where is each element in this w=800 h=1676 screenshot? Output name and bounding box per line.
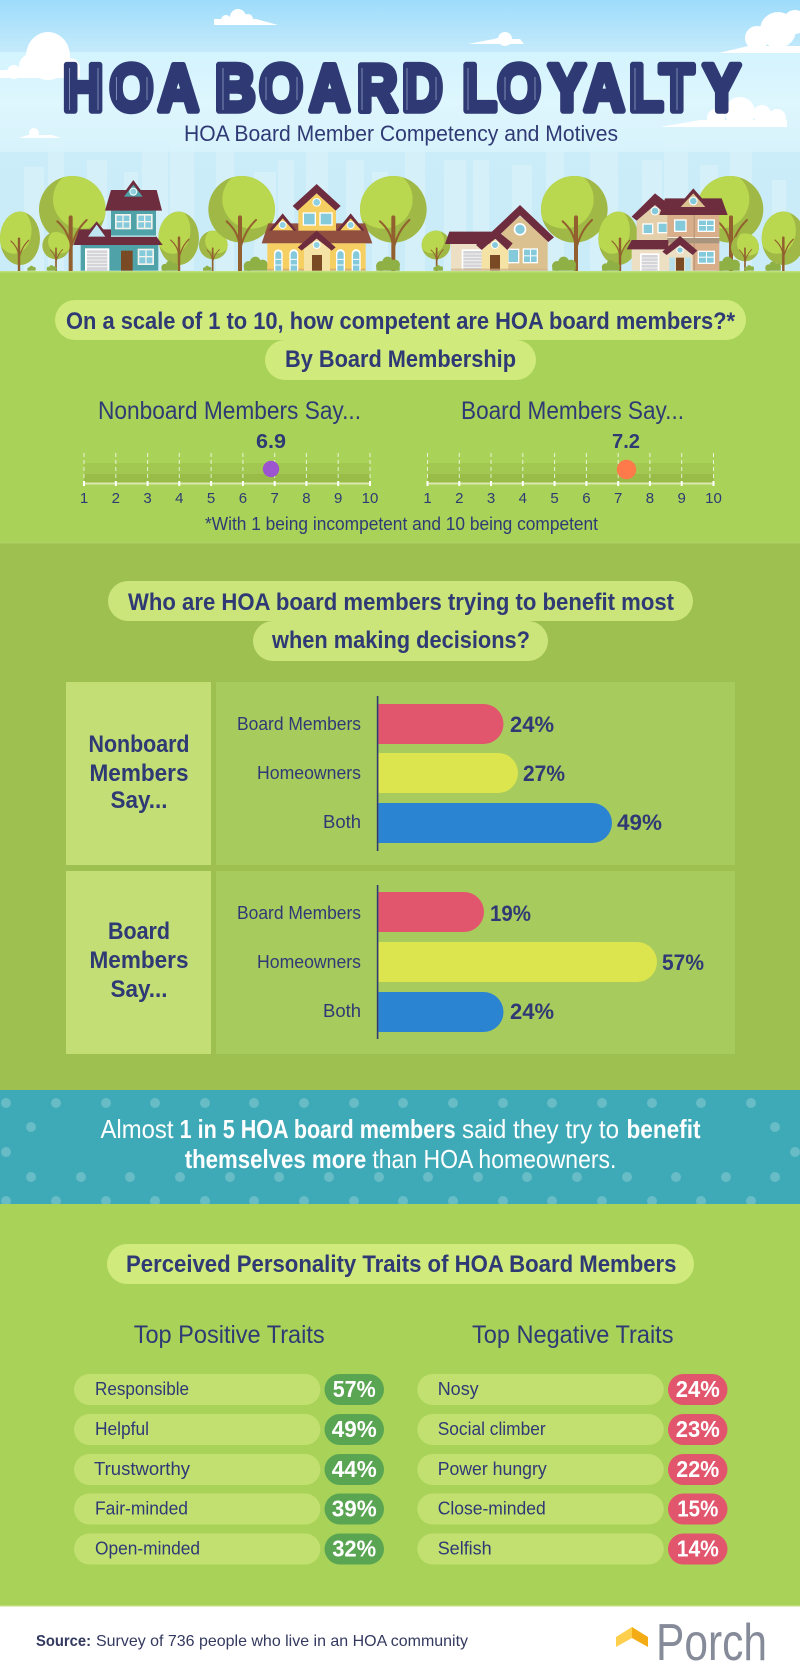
heading pill: when making decisions: [253, 621, 548, 661]
bar: homeowners 27%: [257, 753, 565, 793]
trait: nosy 24%: Nosy: [438, 1379, 479, 1399]
section background: benefit: [0, 542, 800, 1090]
trait: responsible 57%: Responsible: [95, 1379, 189, 1399]
bar: board members 19%: 19%: [490, 901, 531, 926]
bar: board members 19%: Board Members: [237, 903, 361, 923]
scale chart: board members 7.2: 4: [519, 490, 527, 507]
house: teal: [73, 180, 163, 271]
bar: homeowners 57%: [257, 942, 704, 982]
panel: board members: [66, 871, 735, 1054]
trait: fair-minded 39%: 39%: [332, 1496, 377, 1522]
scale heading: nonboard members: Nonboard Members Say...: [98, 397, 361, 425]
bar: both 24%: [323, 992, 554, 1032]
scale chart: board members 7.2: 7.2: [612, 431, 640, 453]
cloud: small left: [19, 128, 61, 138]
bar: both 24%: 24%: [510, 999, 554, 1024]
scale chart: nonboard members 6.9: 4: [175, 490, 183, 507]
header illustration background: sky: [0, 0, 800, 272]
source note: Survey of 736 people who live in an HOA community: [96, 1633, 468, 1650]
trait: responsible 57%: [74, 1374, 384, 1405]
scale chart: board members 7.2: 3: [487, 490, 495, 507]
heading pill: by board membership: [265, 340, 536, 380]
trait: social climber 23%: 23%: [676, 1416, 720, 1442]
trait: social climber 23%: Social climber: [438, 1419, 546, 1439]
heading: top negative traits: Top Negative Traits: [472, 1321, 674, 1349]
scale chart: nonboard members 6.9: 5: [207, 490, 215, 507]
trait: selfish 14%: 14%: [677, 1536, 719, 1562]
bar: board members 24%: 24%: [510, 712, 554, 737]
trait: trustworthy 44%: Trustworthy: [94, 1459, 190, 1479]
footnote: *With 1 being incompetent and 10 being competent: [205, 514, 598, 534]
trait: fair-minded 39%: [74, 1494, 384, 1524]
trait: helpful 49%: Helpful: [95, 1419, 149, 1439]
trait: power hungry 22%: Power hungry: [438, 1459, 547, 1479]
trait: helpful 49%: 49%: [332, 1416, 377, 1442]
scale chart: nonboard members 6.9: 9: [334, 490, 342, 507]
trait: responsible 57%: 57%: [333, 1376, 376, 1402]
scale chart: board members 7.2: 6: [582, 490, 591, 507]
callout band: themselves more: [185, 1144, 366, 1174]
trait: close-minded 15%: Close-minded: [438, 1498, 546, 1518]
callout band: Almost: [100, 1114, 174, 1144]
tree row behind houses: [0, 170, 800, 271]
subtitle: HOA Board Member Competency and Motives: [184, 121, 618, 146]
bar: board members 19%: [237, 892, 531, 932]
scale chart: nonboard members 6.9: 6: [239, 490, 247, 507]
bar: homeowners 27%: Homeowners: [257, 763, 361, 783]
heading pill: who benefits: Who are HOA board members trying to benefit most: [128, 589, 674, 616]
trait: social climber 23%: [417, 1414, 728, 1445]
scale heading: board members: Board Members Say...: [461, 397, 684, 425]
bar: both 49%: Both: [323, 812, 361, 832]
logo wordmark: Porch: [656, 1614, 767, 1672]
list: positive traits: [74, 1374, 384, 1564]
trait: open-minded 32%: [74, 1534, 384, 1564]
icon: porch logo chevron: [616, 1627, 648, 1647]
heading pill: by board membership: By Board Membership: [285, 346, 516, 373]
bar: both 24%: Both: [323, 1001, 361, 1021]
scale chart: nonboard members 6.9: 2: [112, 490, 120, 507]
bar: both 49%: [323, 803, 662, 843]
bar: homeowners 27%: 27%: [523, 761, 565, 786]
title: HOA BOARD LOYALTY: [63, 51, 740, 125]
trait: power hungry 22%: [417, 1454, 728, 1485]
bar: board members 24%: [237, 704, 554, 744]
scale chart: nonboard members 6.9: 6.9: [256, 431, 286, 453]
heading pill: personality traits: [107, 1244, 694, 1284]
trait: trustworthy 44%: [74, 1454, 384, 1485]
scale chart: nonboard members 6.9: 1: [80, 490, 88, 507]
scale chart: nonboard members 6.9: [80, 431, 378, 507]
heading pill: competency question: On a scale of 1 to 10, how competent are HOA board members?*: [66, 308, 736, 335]
panel: nonboard members: Say...: [110, 787, 168, 814]
cloud: small top: [468, 32, 524, 46]
list: negative traits: [417, 1374, 728, 1564]
house: brick two-storey: [627, 188, 728, 271]
trait: selfish 14%: Selfish: [438, 1538, 492, 1558]
callout band: benefit: [626, 1114, 701, 1144]
scale chart: nonboard members 6.9: 10: [362, 490, 378, 507]
scale chart: board members 7.2: [423, 431, 722, 507]
panel: nonboard members: Members: [90, 760, 188, 787]
house: yellow: [262, 184, 372, 271]
panel: nonboard members: Nonboard: [88, 731, 190, 758]
scale chart: nonboard members 6.9: 8: [302, 490, 311, 507]
cloud: right middle: [660, 97, 787, 127]
cloud: top centre: [214, 9, 278, 25]
cloud: left: [0, 32, 80, 80]
bar: homeowners 57%: Homeowners: [257, 952, 361, 972]
scale chart: nonboard members 6.9: 7: [271, 490, 279, 507]
callout band: 1 in 5 HOA board members: [180, 1114, 456, 1144]
bar: homeowners 57%: 57%: [662, 950, 704, 975]
scale chart: board members 7.2: 2: [455, 490, 463, 507]
heading pill: who benefits: [108, 581, 693, 621]
trait: open-minded 32%: 32%: [332, 1536, 376, 1562]
scale chart: board members 7.2: 10: [705, 490, 722, 507]
source note: Source:: [36, 1633, 91, 1650]
bar: both 49%: 49%: [617, 810, 662, 835]
trait: nosy 24%: [417, 1374, 728, 1405]
trait: selfish 14%: [417, 1534, 728, 1564]
scale chart: board members 7.2: 7: [614, 490, 622, 507]
scale chart: board members 7.2: 1: [423, 490, 432, 507]
trait: fair-minded 39%: Fair-minded: [95, 1498, 188, 1518]
callout band: said they try to: [462, 1114, 619, 1144]
section background: competency: [0, 271, 800, 543]
heading pill: competency question: [55, 300, 746, 340]
scale chart: board members 7.2: 5: [550, 490, 559, 507]
heading pill: personality traits: Perceived Personality Traits of HOA Board Members: [126, 1251, 676, 1278]
trait: close-minded 15%: 15%: [677, 1496, 718, 1522]
heading pill: when making decisions: when making decisions?: [271, 627, 530, 654]
heading: top positive traits: Top Positive Traits: [134, 1321, 325, 1349]
trait: open-minded 32%: Open-minded: [95, 1538, 200, 1558]
scale chart: nonboard members 6.9: 3: [143, 490, 152, 507]
trait: power hungry 22%: 22%: [676, 1456, 719, 1482]
callout band: than HOA homeowners.: [372, 1144, 616, 1174]
scale chart: board members 7.2: 9: [678, 490, 686, 507]
house: tan: [445, 205, 554, 271]
section background: traits: [0, 1204, 800, 1606]
panel: board members: Members: [90, 947, 188, 974]
bar: board members 24%: Board Members: [237, 714, 361, 734]
panel: nonboard members: [66, 682, 735, 865]
cloud: top right: [719, 10, 800, 53]
trait: nosy 24%: 24%: [676, 1376, 720, 1402]
trait: helpful 49%: [74, 1414, 384, 1445]
footer background: [0, 1605, 800, 1676]
trait: trustworthy 44%: 44%: [332, 1456, 377, 1482]
trait: close-minded 15%: [417, 1494, 728, 1524]
scale chart: board members 7.2: 8: [646, 490, 654, 507]
panel: board members: Say...: [110, 976, 168, 1003]
callout band: [0, 1090, 800, 1206]
panel: board members: Board: [108, 918, 170, 945]
